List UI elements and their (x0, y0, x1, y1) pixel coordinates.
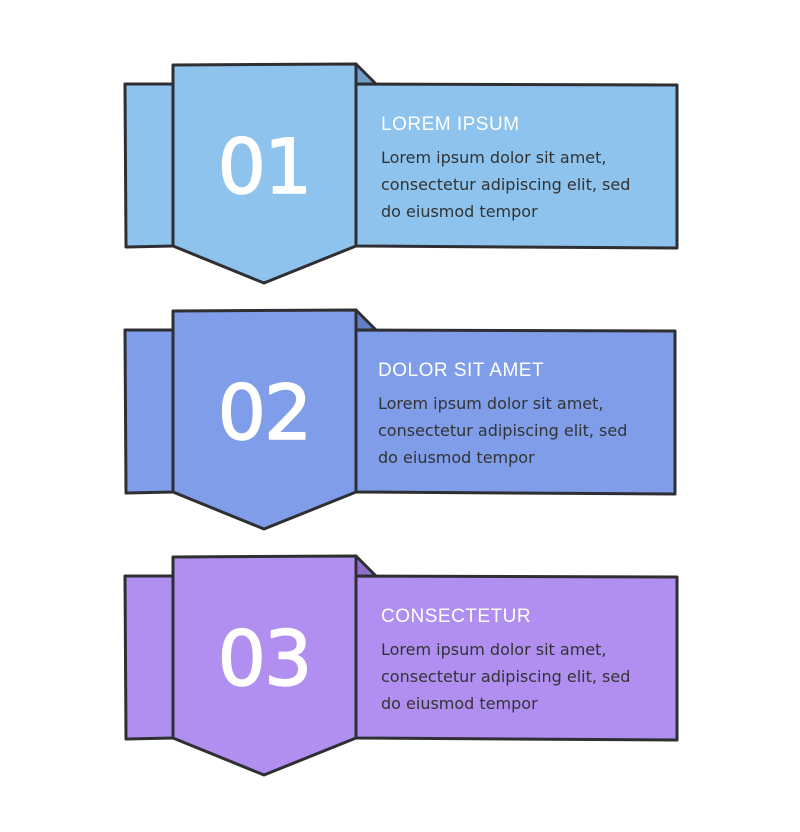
back tab 2 (125, 330, 173, 493)
body 1: do eiusmod tempor (381, 202, 538, 221)
fold 2 (356, 310, 376, 330)
text panel 2 (356, 330, 675, 494)
fold 1 (356, 64, 376, 84)
number 3: 03 (218, 614, 310, 703)
body 3: do eiusmod tempor (381, 694, 538, 713)
body 3 (381, 640, 630, 713)
back tab 3 (125, 576, 173, 739)
step 1 (125, 64, 677, 283)
text panel 3 (356, 576, 677, 740)
body 2: Lorem ipsum dolor sit amet, (378, 394, 604, 413)
shield 1 (173, 64, 356, 283)
number 2: 02 (218, 368, 310, 457)
fold 3 (356, 556, 376, 576)
body 1 (381, 148, 630, 221)
body 1: consectetur adipiscing elit, sed (381, 175, 630, 194)
body 3: consectetur adipiscing elit, sed (381, 667, 630, 686)
body 2: do eiusmod tempor (378, 448, 535, 467)
text panel 1 (356, 84, 677, 248)
back tab 1 (125, 84, 173, 247)
body 3: Lorem ipsum dolor sit amet, (381, 640, 606, 659)
number 1: 01 (218, 122, 310, 211)
heading 2: DOLOR SIT AMET (378, 360, 544, 381)
shield 2 (173, 310, 356, 529)
body 2: consectetur adipiscing elit, sed (378, 421, 627, 440)
shield 3 (173, 556, 356, 775)
step 2 (125, 310, 675, 529)
body 2 (378, 394, 627, 467)
heading 3: CONSECTETUR (381, 606, 531, 627)
step 3 (125, 556, 677, 775)
heading 1: LOREM IPSUM (381, 114, 520, 135)
body 1: Lorem ipsum dolor sit amet, (381, 148, 606, 167)
